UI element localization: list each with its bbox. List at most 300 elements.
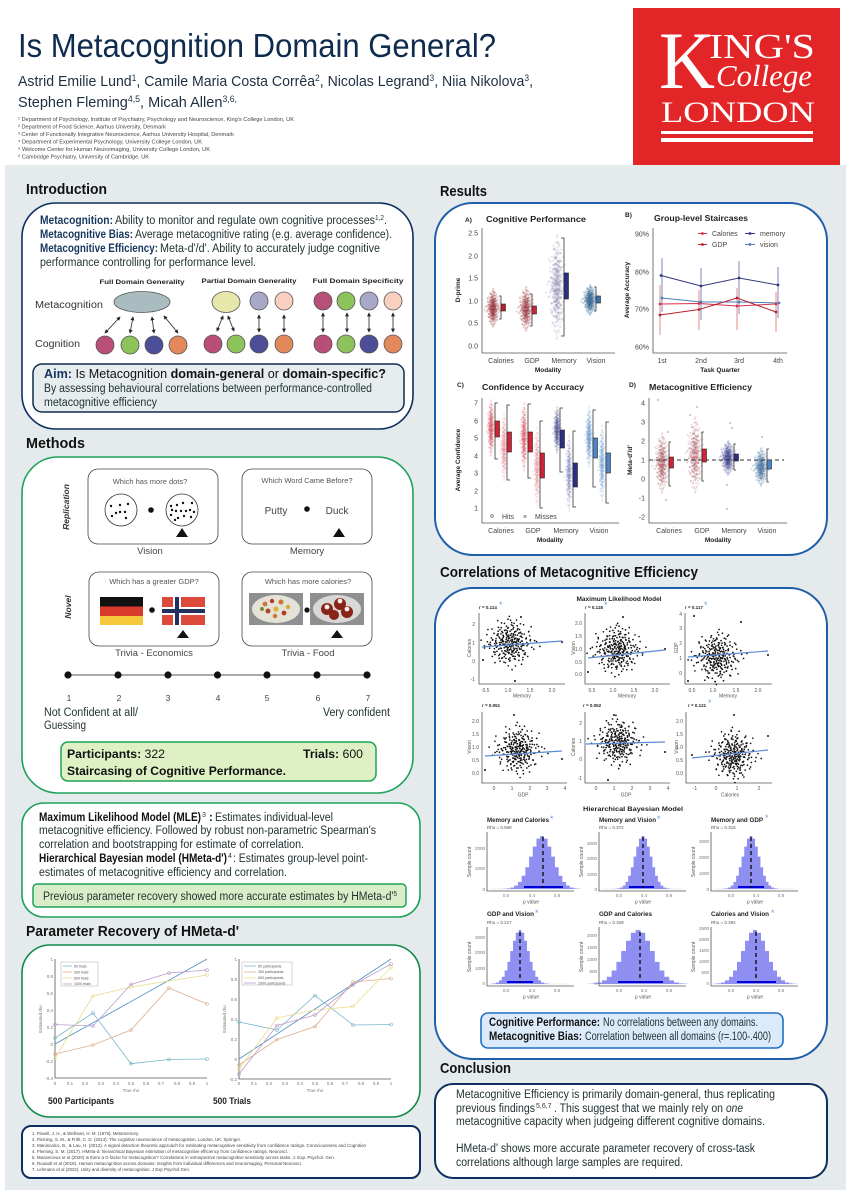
- card: memory task: Which Word Came Before?: [261, 476, 353, 485]
- chart B: group-level staircases: GDP: [712, 242, 728, 249]
- histogram: GDP and calories: 0.4: [641, 988, 648, 993]
- chart B: group-level staircases: 70%: [635, 306, 649, 314]
- chart A: cognitive performance: Modality: [535, 367, 562, 374]
- histogram: memory and vision: Sample count: [579, 846, 585, 877]
- card: memory task: Duck: [326, 506, 349, 517]
- histogram: calories and vision: *: [771, 908, 775, 918]
- histogram: memory and vision: *: [657, 814, 661, 824]
- definitions text: [40, 215, 392, 269]
- scatter: memory vs vision: 1.0: [610, 688, 617, 694]
- participants box: [61, 742, 376, 781]
- card: economics trivia: [89, 572, 219, 646]
- scatter: memory vs vision: 1.5: [631, 688, 638, 694]
- chart A: cognitive performance: 0.0: [468, 344, 478, 350]
- histogram: GDP and vision: 0: [482, 981, 485, 986]
- heading: Parameter Recovery of HMeta-d': Parameter Recovery of HMeta-d': [26, 923, 239, 940]
- line chart: 500 trials: 0.4: [297, 1081, 304, 1086]
- histogram: GDP and vision: 3000: [475, 935, 485, 940]
- line chart: 500 participants: 0.8: [174, 1081, 181, 1086]
- scatter: calories vs vision: *: [708, 698, 712, 708]
- line chart: 500 participants: 1: [206, 1081, 209, 1086]
- line chart: 500 trials: [222, 957, 393, 1093]
- label: 500 Trials: 500 Trials: [213, 1096, 251, 1106]
- line chart: 500 participants: 0.4: [113, 1081, 120, 1086]
- scatter: memory vs calories: Calories: [467, 638, 473, 657]
- chart B: group-level staircases: Task Quarter: [700, 367, 740, 374]
- line chart: 500 participants: 300 trials: [74, 970, 89, 974]
- scatter: memory vs calories: 1.5: [527, 688, 534, 694]
- histogram: memory and GDP: 2000: [699, 855, 709, 860]
- scatter: calories vs vision: 1.5: [676, 732, 683, 738]
- authors: Astrid Emilie Lund: [18, 73, 139, 90]
- line chart: 500 trials: 1000 participants: [258, 982, 286, 986]
- panel: references: 6. Rouault et al (2018). Human metacognition across domains: insights from individual differences and neuroimaging. Personal Neurosci.: [32, 1161, 302, 1166]
- scatter: memory vs calories: -1: [471, 677, 475, 683]
- confidence scale: 3: [166, 693, 171, 703]
- histogram: memory and vision: Memory and Vision: [599, 817, 656, 824]
- definitions text: Average metacognitive rating (e.g. average confidence).: [135, 229, 392, 241]
- chart D: metacognitive efficiency: 2: [641, 438, 645, 446]
- histogram: GDP and calories: 500: [589, 969, 597, 974]
- chart B: group-level staircases: 1st: [657, 358, 667, 365]
- chart B: group-level staircases: B): [625, 212, 632, 219]
- chart A: cognitive performance: 2.5: [468, 230, 478, 238]
- scatter: memory vs calories: 1: [472, 641, 475, 647]
- chart A: cognitive performance: [455, 215, 615, 374]
- histogram: calories and vision: 2000: [699, 937, 709, 942]
- affiliations: ⁵ Welcome Center for Human Neuroimaging, University College London, UK: [18, 147, 211, 153]
- histogram: calories and vision: 1500: [699, 948, 709, 953]
- scatter: memory vs GDP: r = 0.117: [685, 605, 703, 610]
- line chart: 500 participants: 0.8: [47, 974, 53, 979]
- scatter: calories vs vision: 2.0: [676, 719, 683, 725]
- chart D: metacognitive efficiency: GDP: [694, 528, 710, 535]
- authors: , Nicolas Legrand: [320, 73, 430, 90]
- histogram: GDP and calories: 1500: [587, 945, 597, 950]
- histogram: memory and vision: 0.0: [616, 893, 623, 898]
- callout: other correlations: Metacognitive Bias:: [489, 1031, 582, 1043]
- chart C: confidence by accuracy: 4: [474, 454, 478, 460]
- scatter: memory vs vision: 2.0: [652, 688, 659, 694]
- scatter: calories vs vision: 0: [715, 786, 718, 792]
- callout: other correlations: [481, 1013, 783, 1048]
- confidence scale: Very confident: [323, 707, 391, 719]
- affiliations: ² Department of Food Science, Aarhus University, Denmark: [18, 124, 166, 130]
- scatter: GDP vs vision: 1.0: [472, 745, 479, 751]
- chart D: metacognitive efficiency: 4: [641, 400, 645, 408]
- aim box: By assessing behavioural correlations between performance-controlled: [44, 383, 372, 395]
- line chart: 500 trials: 0.2: [266, 1081, 273, 1086]
- logo: King's College London: LONDON: [661, 96, 815, 129]
- scatter: GDP vs calories: 0: [595, 786, 598, 792]
- line chart: 500 participants: 0.5: [128, 1081, 135, 1086]
- participants box: Staircasing of Cognitive Performance.: [67, 766, 286, 778]
- histogram: GDP and calories: 1000: [587, 957, 597, 962]
- line chart: 500 trials: 1: [390, 1081, 393, 1086]
- scatter: calories vs vision: 1.0: [676, 745, 683, 751]
- line chart: 500 trials: 0.5: [312, 1081, 319, 1086]
- card: food trivia: [242, 572, 372, 646]
- subheading: Hierarchical Bayesian Model: Hierarchical Bayesian Model: [583, 806, 683, 813]
- model description text: Estimates individual-level: [215, 812, 333, 824]
- histogram: memory and GDP: *: [765, 813, 769, 823]
- model description text: Hierarchical Bayesian model (HMeta-d'): [39, 853, 227, 865]
- definitions text: Meta-d'/d'. Ability to accurately judge cognitive: [160, 243, 380, 255]
- line chart: 500 participants: 0: [50, 1042, 53, 1047]
- chart D: metacognitive efficiency: Memory: [721, 528, 747, 535]
- scatter: GDP vs vision: 0.0: [472, 771, 479, 777]
- histogram: calories and vision: Rho = 0.392: [711, 920, 736, 925]
- chart B: group-level staircases: 60%: [635, 344, 649, 352]
- chart C: confidence by accuracy: 7: [474, 400, 478, 408]
- panel: references: 4. Fleming, S. M. (2017). HMeta-d: hierarchical Bayesian estimation of metacognitive efficiency from confidence ratings. Neurosci.: [32, 1149, 288, 1154]
- diagram: domain generality models: Full Domain Generality: [100, 279, 185, 286]
- line chart: 500 trials: 0.2: [231, 1037, 237, 1042]
- scatter: GDP vs calories: GDP: [621, 792, 632, 798]
- histogram: memory and calories: 0.8: [554, 893, 561, 898]
- histogram: memory and GDP: 3000: [699, 839, 709, 844]
- histogram: GDP and calories: 2000: [587, 933, 597, 938]
- histogram: calories and vision: [691, 908, 798, 1000]
- authors: 3: [430, 73, 434, 83]
- definitions text: Metacognitive Efficiency:: [40, 243, 158, 255]
- histogram: GDP and calories: 0: [594, 981, 597, 986]
- chart D: metacognitive efficiency: 1: [641, 458, 645, 464]
- label: Memory: Memory: [290, 546, 324, 557]
- scatter: memory vs calories: Memory: [513, 694, 532, 700]
- histogram: GDP and vision: ρ value: [523, 994, 539, 1000]
- scatter: GDP vs calories: 0: [579, 757, 582, 763]
- histogram: GDP and calories: [579, 911, 688, 1000]
- chart A: cognitive performance: Cognitive Performance: [486, 215, 587, 224]
- scatter: memory vs GDP: 3: [679, 626, 682, 632]
- authors: , Niia Nikolova: [434, 73, 525, 90]
- histogram: GDP and vision: Sample count: [467, 941, 473, 972]
- chart C: confidence by accuracy: Hits: [502, 514, 515, 521]
- chart B: group-level staircases: 3rd: [734, 358, 744, 365]
- confidence scale: Guessing: [44, 720, 86, 732]
- histogram: calories and vision: 0: [706, 981, 709, 986]
- panel: methods: [22, 457, 413, 793]
- affiliations: ⁴ Department of Experimental Psychology, University College London, UK: [18, 140, 203, 146]
- definitions text: .: [384, 215, 387, 227]
- confidence scale: Not Confident at all/: [44, 707, 139, 719]
- line chart: 500 trials: 0.8: [358, 1081, 365, 1086]
- histogram: memory and vision: 2000: [587, 856, 597, 861]
- diagram: domain generality models: Full Domain Specificity: [312, 278, 404, 285]
- histogram: GDP and calories: Rho = 0.328: [599, 920, 624, 925]
- histogram: memory and calories: Sample count: [467, 846, 473, 877]
- authors: 2: [315, 73, 320, 83]
- affiliations: ³ Center of Functionally Integrative Neuroscience, Aarhus University Hospital, Denmark: [18, 132, 234, 138]
- chart A: cognitive performance: 0.5: [468, 320, 478, 328]
- histogram: GDP and vision: 0.8: [554, 988, 561, 993]
- heading: Correlations of Metacognitive Efficiency: Correlations of Metacognitive Efficiency: [440, 564, 699, 581]
- scatter: GDP vs vision: 2: [529, 786, 532, 792]
- panel: conclusion: [435, 1084, 827, 1178]
- definitions text: performance controlling for performance level.: [40, 257, 256, 269]
- chart D: metacognitive efficiency: -1: [639, 496, 645, 502]
- panel: models: [22, 803, 420, 917]
- scatter: memory vs GDP: 0: [679, 671, 682, 677]
- authors: ,: [529, 73, 533, 90]
- histogram: memory and GDP: [691, 813, 798, 906]
- line chart: 500 participants: 0.4: [47, 1008, 53, 1013]
- subheading: Maximum Likelihood Model: Maximum Likelihood Model: [576, 596, 662, 603]
- chart C: confidence by accuracy: 5: [474, 436, 478, 442]
- scatter: calories vs vision: Vision: [674, 740, 680, 754]
- histogram: GDP and vision: [467, 908, 574, 1000]
- line chart: 500 participants: True rho: [123, 1088, 140, 1093]
- line chart: 500 trials: 50 participants: [258, 964, 282, 968]
- label: Novel: Novel: [63, 595, 73, 619]
- histogram: memory and calories: 2000: [475, 846, 485, 851]
- chart A: cognitive performance: D-prime: [455, 277, 462, 302]
- chart A: cognitive performance: 2.0: [468, 254, 478, 260]
- histogram: memory and GDP: Sample count: [691, 846, 697, 877]
- parameter recovery callout: 5: [393, 891, 397, 898]
- definitions text: Metacognitive Bias:: [40, 229, 133, 241]
- definitions text: 1,2: [375, 215, 384, 222]
- panel: conclusion: one: [726, 1103, 743, 1115]
- scatter: memory vs calories: 0.5: [483, 688, 490, 694]
- line chart: 500 trials: 0.1: [251, 1081, 258, 1086]
- line chart: 500 participants: 600 trials: [74, 976, 89, 980]
- scatter: memory vs calories: *: [499, 600, 503, 610]
- model description text: estimates of metacognitive efficiency and correlation.: [39, 867, 287, 879]
- histogram: memory and vision: 0: [594, 887, 597, 892]
- chart C: confidence by accuracy: 6: [474, 418, 478, 426]
- chart D: metacognitive efficiency: Metacognitive Efficiency: [649, 383, 753, 392]
- scatter: calories vs vision: Calories: [721, 792, 740, 798]
- affiliations: ⁶ Cambridge Psychiatry, University of Cambridge, UK: [18, 154, 150, 160]
- scatter: memory vs GDP: 1.0: [710, 688, 717, 694]
- line chart: 500 trials: 300 participants: [258, 970, 284, 974]
- scatter: GDP vs vision: 3: [546, 786, 549, 792]
- scatter: GDP vs vision: 0.5: [472, 758, 479, 764]
- card: vision task: [88, 469, 218, 544]
- chart C: confidence by accuracy: 1: [474, 506, 478, 512]
- line chart: 500 participants: 0.7: [158, 1081, 165, 1086]
- panel: conclusion: HMeta-d' shows more accurate parameter recovery of cross-task: [456, 1143, 755, 1155]
- histogram: memory and vision: ρ value: [635, 900, 651, 906]
- line chart: 500 participants: Estimated rho: [38, 1005, 43, 1033]
- scatter: memory vs vision: 0.0: [575, 672, 582, 678]
- line chart: 500 participants: 50 trials: [74, 964, 87, 968]
- model description text: correlation and bootstrapping for estimate of correlation.: [39, 839, 304, 851]
- line chart: 500 trials: 0.8: [231, 977, 237, 982]
- histogram: memory and calories: Rho = 0.568: [487, 825, 512, 830]
- chart B: group-level staircases: memory: [760, 231, 786, 238]
- histogram: memory and GDP: 0.8: [778, 893, 785, 898]
- model description text: : Estimates group-level point-: [233, 853, 368, 865]
- parameter recovery callout: Previous parameter recovery showed more accurate estimates by HMeta-d': [43, 891, 427, 903]
- line chart: 500 trials: 0.7: [342, 1081, 349, 1086]
- scatter: memory vs calories: 0: [472, 659, 475, 665]
- chart C: confidence by accuracy: [455, 382, 619, 544]
- line chart: 500 participants: 0.1: [67, 1081, 74, 1086]
- histogram: memory and calories: 1000: [475, 866, 485, 871]
- card: memory task: Putty: [265, 506, 287, 517]
- scatter: calories vs vision: 1: [736, 786, 739, 792]
- chart C: confidence by accuracy: Vision: [590, 528, 609, 535]
- heading: Results: Results: [440, 183, 487, 200]
- card: food trivia: Which has more calories?: [265, 577, 351, 586]
- panel: conclusion: previous findings: [456, 1103, 535, 1115]
- chart D: metacognitive efficiency: Meta-d'/d': [627, 445, 634, 475]
- line chart: 500 participants: 0.9: [189, 1081, 196, 1086]
- histogram: calories and vision: ρ value: [747, 994, 763, 1000]
- scatter: GDP vs vision: 1.5: [472, 732, 479, 738]
- line chart: 500 participants: 1000 trials: [74, 982, 91, 986]
- histogram: memory and calories: Memory and Calories: [487, 817, 549, 824]
- histogram: memory and GDP: 0.0: [728, 893, 735, 898]
- histogram: memory and GDP: Rho = 0.315: [711, 825, 736, 830]
- diagram: domain generality models: Cognition: [35, 339, 80, 350]
- histogram: memory and vision: 3000: [587, 841, 597, 846]
- panel: conclusion: correlations although large samples are required.: [456, 1157, 683, 1169]
- chart D: metacognitive efficiency: -2: [639, 514, 645, 522]
- panel: parameter recovery: [22, 945, 420, 1117]
- diagram: domain generality models: Metacognition: [35, 300, 103, 311]
- callout: other correlations: No correlations between any domains.: [603, 1017, 758, 1029]
- chart C: confidence by accuracy: Calories: [488, 528, 514, 535]
- chart B: group-level staircases: 90%: [635, 232, 649, 238]
- histogram: memory and calories: [467, 814, 581, 906]
- logo: King's College London: K: [659, 15, 715, 106]
- histogram: memory and vision: [579, 814, 686, 906]
- line chart: 500 trials: 0: [234, 1057, 237, 1062]
- aim box: [33, 364, 404, 412]
- histogram: GDP and vision: 0.4: [529, 988, 536, 993]
- scatter: GDP vs calories: r = 0.052: [583, 703, 602, 708]
- line chart: 500 trials: 0.6: [327, 1081, 334, 1086]
- model description text: :: [209, 812, 213, 824]
- line chart: 500 trials: 0.3: [282, 1081, 289, 1086]
- histogram: calories and vision: 1000: [699, 959, 709, 964]
- scatter: calories vs vision: [674, 698, 772, 798]
- chart D: metacognitive efficiency: Modality: [705, 537, 732, 544]
- chart C: confidence by accuracy: ×: [523, 514, 527, 521]
- line chart: 500 participants: 1: [50, 957, 53, 962]
- label: Trivia - Economics: Trivia - Economics: [115, 648, 193, 659]
- scatter: GDP vs vision: [467, 703, 567, 798]
- scatter: GDP vs vision: Vision: [467, 740, 473, 754]
- chart C: confidence by accuracy: Memory: [553, 528, 579, 535]
- callout: other correlations: Cognitive Performance:: [489, 1017, 600, 1029]
- histogram: memory and vision: 1000: [587, 872, 597, 877]
- chart C: confidence by accuracy: C): [457, 382, 464, 389]
- authors: 3,6,: [222, 94, 237, 104]
- chart A: cognitive performance: 1.0: [468, 298, 478, 306]
- histogram: memory and GDP: 1000: [699, 871, 709, 876]
- histogram: calories and vision: 0.8: [778, 988, 785, 993]
- parameter recovery callout: [33, 884, 406, 907]
- panel: correlations: [435, 588, 827, 1059]
- authors: , Camile Maria Costa Corrêa: [136, 73, 316, 90]
- scatter: GDP vs calories: [571, 703, 670, 798]
- diagram: domain generality models: Partial Domain Generality: [202, 278, 297, 285]
- line chart: 500 participants: 0.6: [47, 991, 53, 996]
- histogram: calories and vision: Calories and Vision: [711, 911, 769, 918]
- line chart: 500 participants: [38, 957, 209, 1093]
- scatter: memory vs vision: 0.5: [589, 688, 596, 694]
- histogram: memory and GDP: Memory and GDP: [711, 817, 764, 824]
- scatter: calories vs vision: 2: [758, 786, 761, 792]
- line chart: 500 trials: 0.9: [373, 1081, 380, 1086]
- line chart: 500 participants: 0.6: [143, 1081, 150, 1086]
- chart C: confidence by accuracy: GDP: [525, 528, 541, 535]
- line chart: 500 participants: -0.4: [45, 1076, 53, 1081]
- scatter: memory vs GDP: Memory: [719, 694, 738, 700]
- line chart: 500 participants: -0.2: [45, 1059, 53, 1064]
- scatter: calories vs vision: -1: [693, 786, 697, 792]
- logo: King's College London: ING'S: [709, 27, 815, 66]
- scatter: GDP vs calories: 2: [579, 721, 582, 727]
- chart C: confidence by accuracy: Average Confidence: [455, 428, 462, 491]
- histogram: memory and vision: 0.4: [641, 893, 648, 898]
- aim box: Aim: Is Metacognition domain-general or domain-specific?: [44, 367, 386, 381]
- histogram: memory and GDP: 0: [706, 887, 709, 892]
- chart D: metacognitive efficiency: 3: [641, 420, 645, 426]
- chart D: metacognitive efficiency: Vision: [758, 528, 777, 535]
- scatter: GDP vs calories: 4: [667, 786, 670, 792]
- model description text: [39, 812, 376, 879]
- panel: results: [435, 203, 827, 555]
- scatter: calories vs vision: r = 0.121: [688, 703, 707, 708]
- title: Is Metacognition Domain General?: [18, 27, 496, 64]
- chart A: cognitive performance: GDP: [524, 358, 540, 365]
- line chart: 500 trials: 0.4: [231, 1017, 237, 1022]
- scatter: memory vs calories: r = 0.114: [479, 605, 497, 610]
- card: vision task: Which has more dots?: [113, 477, 187, 486]
- histogram: calories and vision: Sample count: [691, 941, 697, 972]
- scatter: memory vs vision: [571, 600, 670, 700]
- confidence scale: 4: [216, 693, 221, 703]
- line chart: 500 trials: Estimated rho: [222, 1005, 227, 1033]
- histogram: GDP and calories: Sample count: [579, 941, 585, 972]
- model description text: Maximum Likelihood Model (MLE): [39, 812, 201, 824]
- chart B: group-level staircases: vision: [760, 242, 778, 249]
- definitions text: Metacognition:: [40, 215, 113, 227]
- scatter: GDP vs vision: 0: [493, 786, 496, 792]
- chart A: cognitive performance: Memory: [551, 358, 577, 365]
- scatter: memory vs GDP: 1: [679, 656, 682, 662]
- scatter: memory vs GDP: [674, 600, 772, 700]
- authors: 4,5: [128, 94, 140, 104]
- confidence scale: 6: [316, 693, 321, 703]
- scatter: calories vs vision: 0.0: [676, 771, 683, 777]
- scatter: memory vs calories: [467, 600, 565, 700]
- histogram: GDP and vision: 2000: [475, 950, 485, 955]
- diagram: domain generality models: [35, 278, 404, 354]
- model description text: metacognitive efficiency. Followed by robust non-parametric Spearman's: [39, 825, 376, 837]
- panel: introduction: [22, 203, 413, 429]
- panel: references: 3. Maniscalco, B., & Lau, H. (2012). A signal detection theoretic approach for estimating metacognitive sensitivity from confidence ratings. Consciousness and Cognition: [32, 1143, 367, 1148]
- histogram: calories and vision: 2500: [699, 926, 709, 931]
- scatter: memory vs GDP: *: [704, 600, 708, 610]
- line chart: 500 trials: 0.6: [231, 997, 237, 1002]
- histogram: GDP and calories: GDP and Calories: [599, 911, 652, 918]
- line chart: 500 trials: -0.2: [229, 1077, 237, 1082]
- line chart: 500 trials: 600 participants: [258, 976, 284, 980]
- histogram: GDP and calories: 0.8: [666, 988, 673, 993]
- line chart: 500 participants: 0: [54, 1081, 57, 1086]
- histogram: calories and vision: 0.4: [753, 988, 760, 993]
- panel: references: [22, 1126, 420, 1178]
- histogram: memory and calories: 0.0: [503, 893, 510, 898]
- chart B: group-level staircases: Group-level Staircases: [654, 214, 749, 223]
